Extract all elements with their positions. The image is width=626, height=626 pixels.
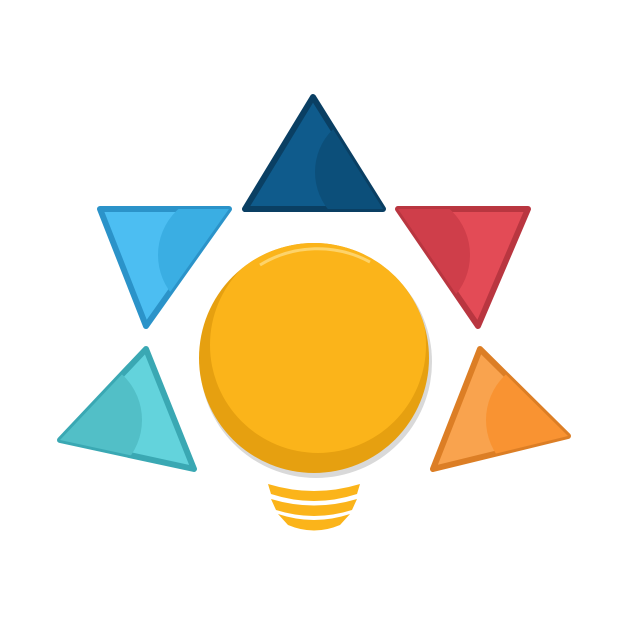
triangle: lower-right orange (430, 346, 571, 472)
bulb base (268, 484, 360, 530)
triangle: lower-left teal (57, 346, 197, 472)
bulb globe (199, 237, 432, 478)
triangle: upper-right red (395, 206, 531, 329)
triangle: upper-left light blue (97, 206, 232, 329)
triangle: top dark blue (242, 94, 386, 212)
